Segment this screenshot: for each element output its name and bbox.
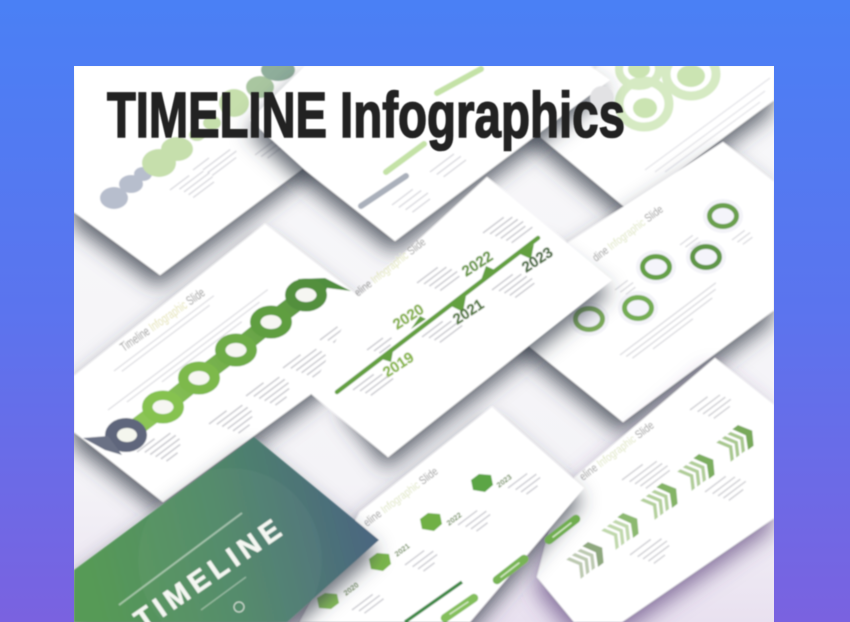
body text lines xyxy=(170,142,280,198)
year labels: 2023 xyxy=(519,244,556,276)
slide: top right rings xyxy=(520,52,774,209)
grey circle chain xyxy=(100,167,152,209)
timeline bar xyxy=(337,238,538,392)
title: TIMELINE xyxy=(107,79,327,151)
year labels: 2020 xyxy=(342,580,361,598)
slide heading: Timeline Infographic Slide xyxy=(117,285,208,354)
slide heading: eline Infographic Slide xyxy=(352,236,428,299)
decorative circle xyxy=(138,468,322,622)
slide collage xyxy=(74,52,774,622)
ring nodes xyxy=(569,199,743,336)
slide: arrows xyxy=(537,358,774,622)
green nodes xyxy=(142,390,184,424)
main panel xyxy=(74,52,774,622)
year labels: 2023 xyxy=(495,472,514,490)
green circle chain xyxy=(142,59,295,177)
year labels xyxy=(380,244,556,381)
arrow icons xyxy=(566,420,760,580)
wave ribbon xyxy=(83,278,351,455)
column text lines xyxy=(353,207,535,402)
year labels: 2021 xyxy=(393,541,412,559)
column text lines xyxy=(622,387,749,572)
title xyxy=(107,79,625,151)
text lines xyxy=(352,469,543,618)
green bars xyxy=(386,69,481,172)
year labels xyxy=(342,472,514,598)
timeline bar xyxy=(405,582,462,622)
timeline markers xyxy=(378,244,534,362)
cover icon xyxy=(234,602,244,612)
title: Infographics xyxy=(340,79,625,151)
grey node xyxy=(105,418,147,452)
slide heading: dine Infographic Slide xyxy=(591,204,666,264)
grey ghost shape xyxy=(590,86,614,110)
slide: top centre bars xyxy=(250,66,614,241)
slide: year timeline xyxy=(310,177,612,457)
green pill buttons xyxy=(445,519,576,618)
description lines xyxy=(108,290,274,418)
year labels: 2022 xyxy=(459,248,496,280)
year labels: 2022 xyxy=(445,510,464,528)
ribbon arrow tip xyxy=(298,277,351,292)
year labels: 2021 xyxy=(450,296,487,328)
slide: wave ribbon xyxy=(74,224,370,502)
year labels: 2019 xyxy=(380,349,417,381)
slide heading: eline Infographic Slide xyxy=(362,466,441,529)
grey bar xyxy=(361,176,406,206)
cover subtitle line xyxy=(201,577,246,610)
year labels: 2020 xyxy=(390,301,427,333)
slide heading: eline Infographic Slide xyxy=(578,420,657,483)
cover tagline xyxy=(119,513,242,605)
rings xyxy=(619,52,716,127)
hexagon nodes xyxy=(317,474,493,609)
slide: hexagon milestones xyxy=(300,407,584,622)
slide: circle rings xyxy=(480,142,774,422)
slide: title cover xyxy=(74,437,379,622)
column text lines xyxy=(136,326,342,462)
slide: top left circles xyxy=(74,66,317,300)
